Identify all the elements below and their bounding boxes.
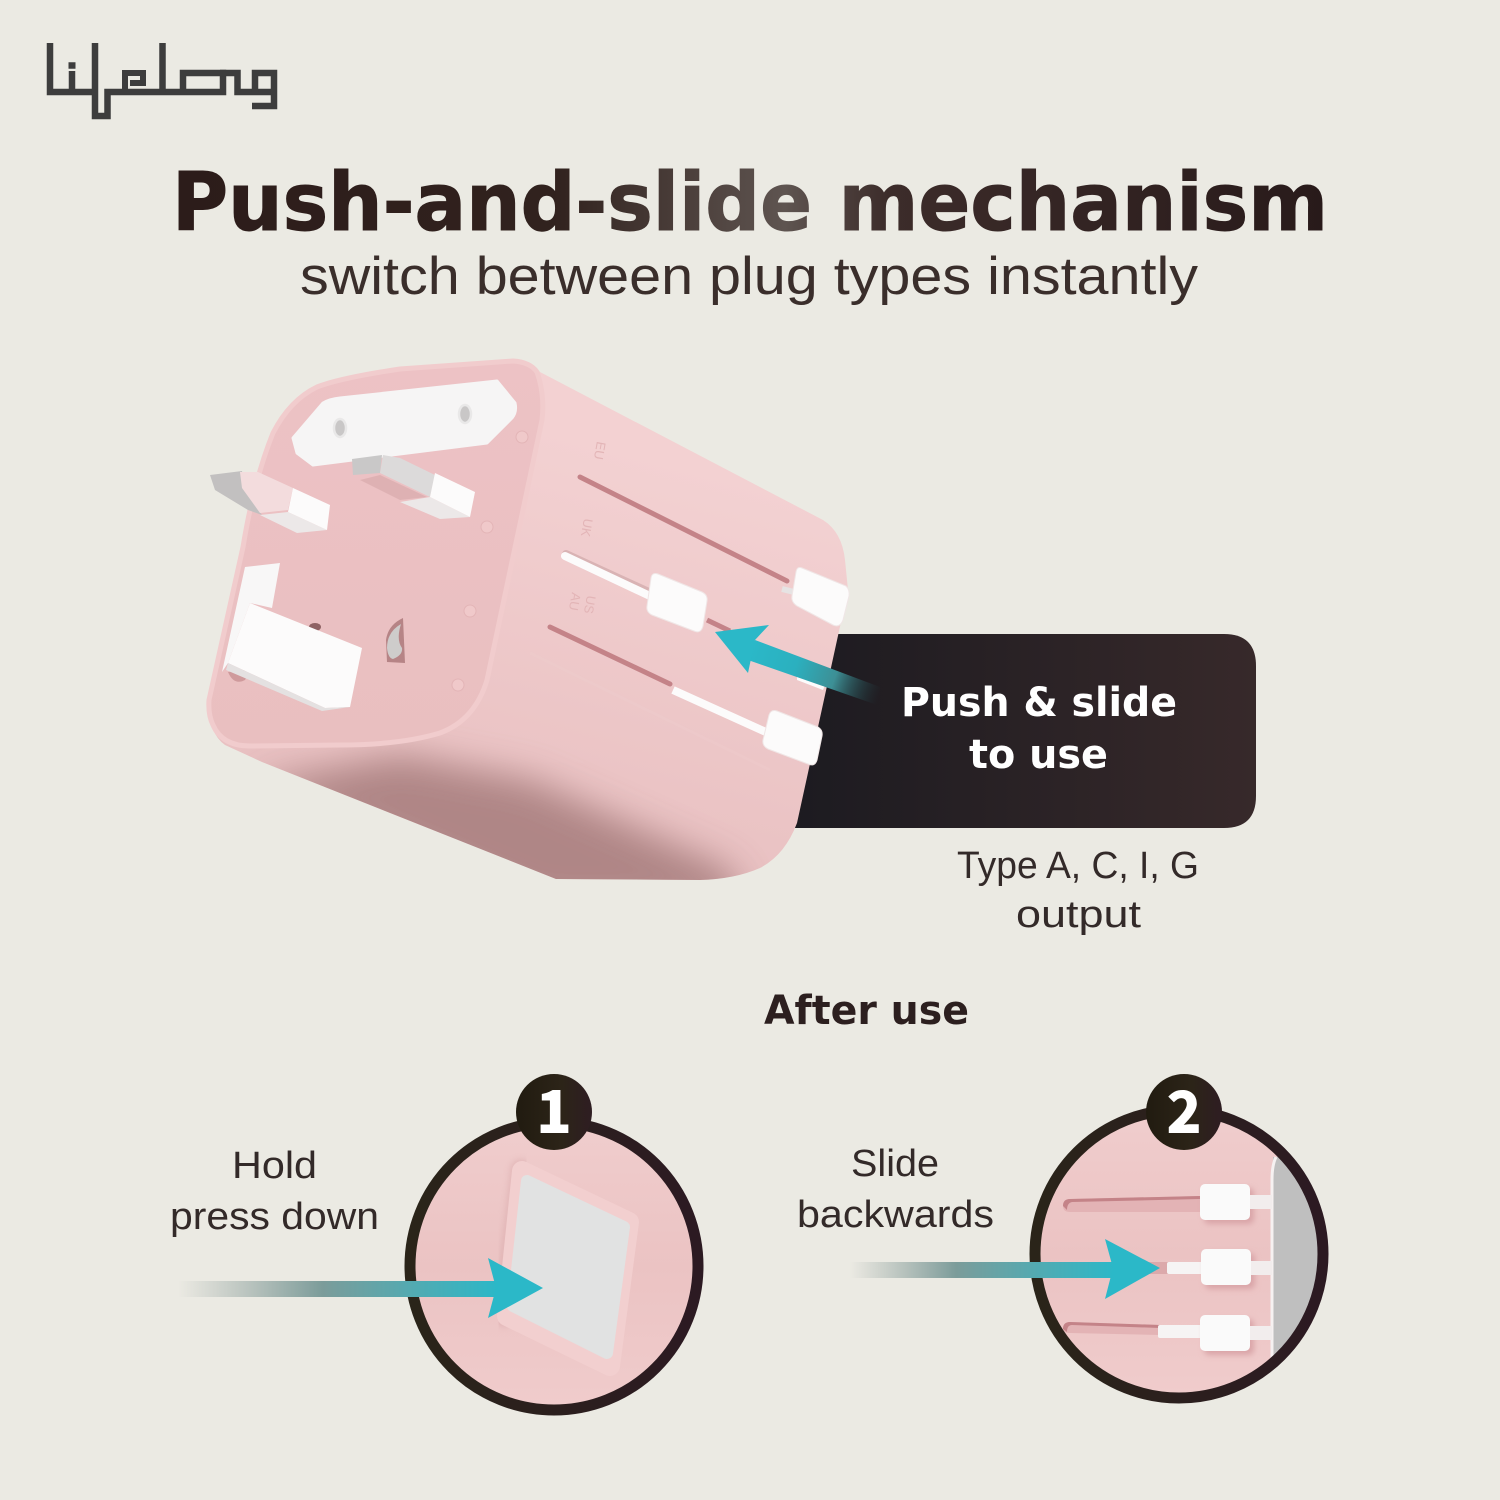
EU plug pins bbox=[334, 405, 471, 437]
step 1 circle bbox=[409, 1121, 699, 1411]
text: Hold press down bbox=[170, 1145, 379, 1238]
face dots bbox=[452, 431, 528, 691]
socket hole bbox=[386, 618, 405, 663]
adapter front face bbox=[209, 361, 543, 746]
slot top bbox=[1063, 1184, 1272, 1224]
button shadow bbox=[504, 1170, 521, 1316]
badge 1 bbox=[516, 1065, 592, 1150]
slot bottom bbox=[1063, 1315, 1272, 1355]
side labels bbox=[566, 440, 609, 615]
side highlight bbox=[530, 653, 770, 770]
title: Push-and-slide mechanism bbox=[172, 156, 1328, 249]
side labels: AU bbox=[566, 591, 584, 612]
side labels: US bbox=[581, 594, 599, 615]
slider slot US bbox=[550, 627, 825, 765]
text: Hold press down: press down bbox=[170, 1196, 379, 1238]
text: Hold press down: Hold bbox=[232, 1145, 317, 1187]
slider slot UK bbox=[565, 554, 730, 632]
callout: Push & slide to use bbox=[770, 634, 1256, 828]
side labels: EU bbox=[591, 440, 609, 461]
badge 2 bbox=[1146, 1066, 1222, 1150]
ring bbox=[410, 1122, 698, 1410]
text: Slide backwards: backwards bbox=[797, 1194, 994, 1236]
badge 1: 1 bbox=[536, 1065, 572, 1150]
arrow: step 1 bbox=[178, 1258, 543, 1318]
step 2 circle bbox=[1034, 1109, 1340, 1400]
adapter edge bbox=[1273, 1157, 1318, 1355]
subtitle: switch between plug types instantly bbox=[300, 247, 1199, 306]
logo: Lifelong bbox=[50, 43, 274, 116]
button rim bbox=[507, 1171, 629, 1366]
adapter side shading bbox=[270, 740, 750, 880]
button face bbox=[513, 1181, 624, 1353]
side labels: UK bbox=[578, 517, 596, 538]
ring bbox=[1035, 1110, 1323, 1398]
earth prong bbox=[222, 563, 362, 711]
adapter body side bbox=[209, 361, 848, 880]
callout: Push & slide to use: Push & slide bbox=[901, 680, 1177, 726]
slider slot EU bbox=[580, 477, 849, 626]
arrow: step 2 bbox=[850, 1239, 1160, 1299]
text: Slide backwards: Slide bbox=[851, 1143, 939, 1185]
badge 2: 2 bbox=[1166, 1066, 1202, 1150]
heading: After use: After use bbox=[764, 988, 969, 1034]
slot middle bbox=[1149, 1249, 1270, 1291]
product: pink travel adapter bbox=[209, 361, 849, 910]
text: Type A, C, I, G output bbox=[957, 845, 1199, 936]
callout: Push & slide to use: to use bbox=[969, 732, 1108, 778]
text: Slide backwards bbox=[797, 1143, 994, 1236]
text: Type A, C, I, G output: Type A, C, I, G bbox=[957, 845, 1199, 887]
prong left bbox=[210, 471, 330, 533]
EU plug plate bbox=[293, 381, 516, 465]
prong right bbox=[352, 455, 475, 519]
text: Type A, C, I, G output: output bbox=[1016, 894, 1142, 936]
arrow: push and slide bbox=[715, 625, 880, 706]
